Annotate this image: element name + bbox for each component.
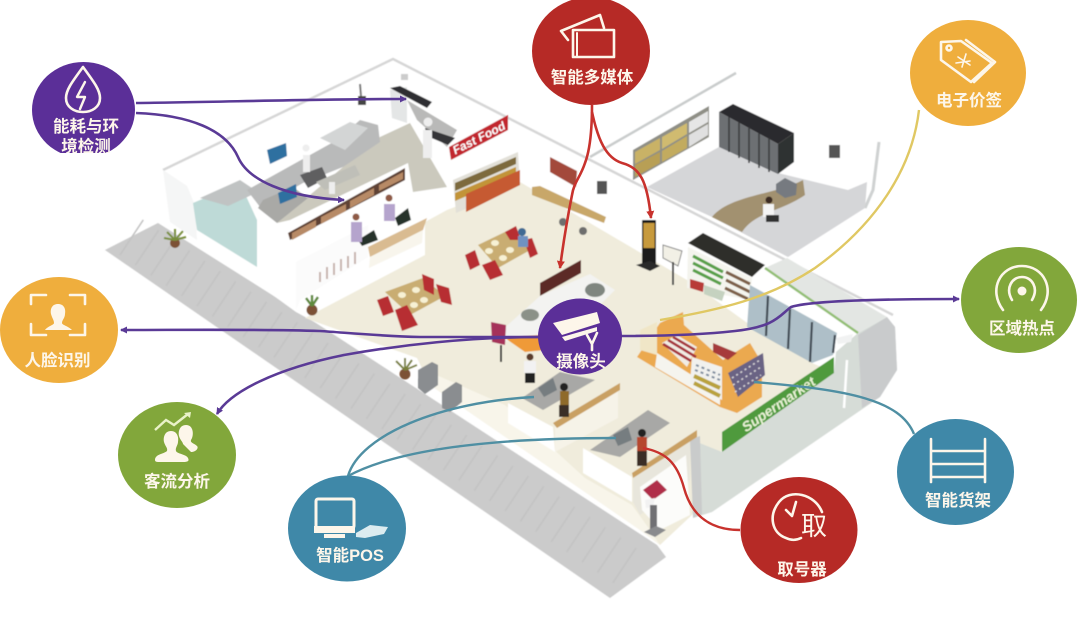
circle: zone hotspot: 区域热点: [989, 319, 1055, 338]
connector: camera to customer flow: [217, 337, 540, 414]
plants: [164, 229, 417, 380]
sidewalk: [105, 223, 666, 598]
wall picture and bar counter: [532, 157, 607, 235]
icon: security camera: [553, 312, 600, 350]
sign: Fast Food: Fast Food: [450, 118, 508, 157]
building walls: [162, 58, 897, 545]
refrigerated display: [687, 233, 765, 301]
circle: customer flow analysis: [118, 402, 236, 508]
chef figures: [302, 118, 432, 194]
luggage: [776, 178, 797, 198]
upper wall band: [765, 258, 887, 333]
icon: people and trend: [155, 412, 198, 462]
circle: smart POS: [288, 476, 406, 582]
circle: energy and environment: 能耗与环: [53, 117, 119, 136]
sign: Supermarket: [722, 357, 834, 452]
cashier figures: [524, 354, 647, 466]
supermarket shelves: [637, 312, 765, 413]
digital menu board and food counter: [491, 260, 615, 362]
queue ticket kiosk: [643, 480, 667, 537]
circle: face recognition: [0, 277, 118, 383]
circle: zone hotspot: [961, 247, 1077, 353]
connector: multimedia to digital menu: [560, 105, 592, 268]
icon: wifi signal: [996, 266, 1048, 310]
cashier counter 2: [583, 410, 697, 530]
seated worker: [763, 196, 779, 222]
menu boards: [288, 168, 405, 240]
circle: smart multimedia: 智能多媒体: [551, 67, 634, 87]
circle: camera hub: 摄像头: [556, 352, 606, 371]
connector: camera to face recognition: [121, 330, 540, 337]
circle: electronic price tag: 电子价签: [936, 90, 1002, 110]
icon: face frame: [31, 295, 85, 335]
connector: energy to menu: [136, 113, 344, 200]
food shelf: [453, 152, 520, 213]
connector: smart shelf: [754, 382, 914, 434]
connector: energy to kitchen: [136, 99, 406, 103]
circle: queue number machine: 取号器: [777, 561, 827, 579]
circle: smart shelf: 智能货架: [925, 490, 991, 510]
cashier counter 1: [508, 372, 620, 452]
connector: multimedia to signage: [592, 112, 651, 218]
sign stand: [663, 245, 682, 285]
dining table: right: [465, 226, 538, 280]
store floor: [305, 182, 833, 545]
server racks: [719, 104, 794, 174]
circle: camera hub: [538, 298, 622, 374]
glass fridges: [747, 268, 858, 363]
ceiling cameras: [358, 74, 408, 105]
connector: POS to counter 2: [348, 438, 616, 476]
wall: right exterior: [690, 317, 897, 518]
icon: energy drop: [66, 67, 100, 112]
icon: clock with character: 取: [801, 511, 827, 541]
connector: POS to counter 1: [348, 397, 534, 476]
dining table: left: [377, 274, 452, 331]
icon: media frames: [561, 15, 614, 57]
kiosk: digital signage: [636, 220, 660, 271]
connector: camera to hotspot: [620, 299, 959, 336]
circle: energy and environment: [32, 62, 135, 158]
circle: smart shelf: [897, 419, 1014, 525]
sign: Supermarket: Supermarket: [739, 373, 819, 435]
connector: ticket machine: [643, 448, 740, 530]
circle: face recognition: 人脸识别: [24, 350, 90, 370]
video wall: [633, 106, 709, 180]
entrance gates: [418, 362, 462, 412]
kitchen: [193, 86, 457, 267]
icon: price tag: [941, 40, 995, 82]
circle: electronic price tag: [910, 20, 1026, 126]
reception desk: [712, 180, 805, 232]
circle: energy and environment: 境检测: [61, 136, 111, 156]
circle: smart POS: 智能POS: [316, 545, 384, 565]
wall display: [829, 145, 840, 158]
icon: shelf rack: [931, 439, 985, 482]
connector: price tag to shelf: [660, 110, 919, 320]
icon: monitor and card reader: [314, 499, 388, 538]
circle: customer flow analysis: 客流分析: [144, 471, 210, 491]
staff figures: [351, 194, 395, 242]
circle: smart multimedia: [532, 0, 650, 105]
circle: queue number machine: [740, 477, 858, 583]
front floor strip: [425, 370, 660, 545]
panel: isometric store floor plan: [105, 58, 897, 598]
cashier counter: fast food: [296, 194, 427, 310]
room: back office: [590, 73, 879, 257]
